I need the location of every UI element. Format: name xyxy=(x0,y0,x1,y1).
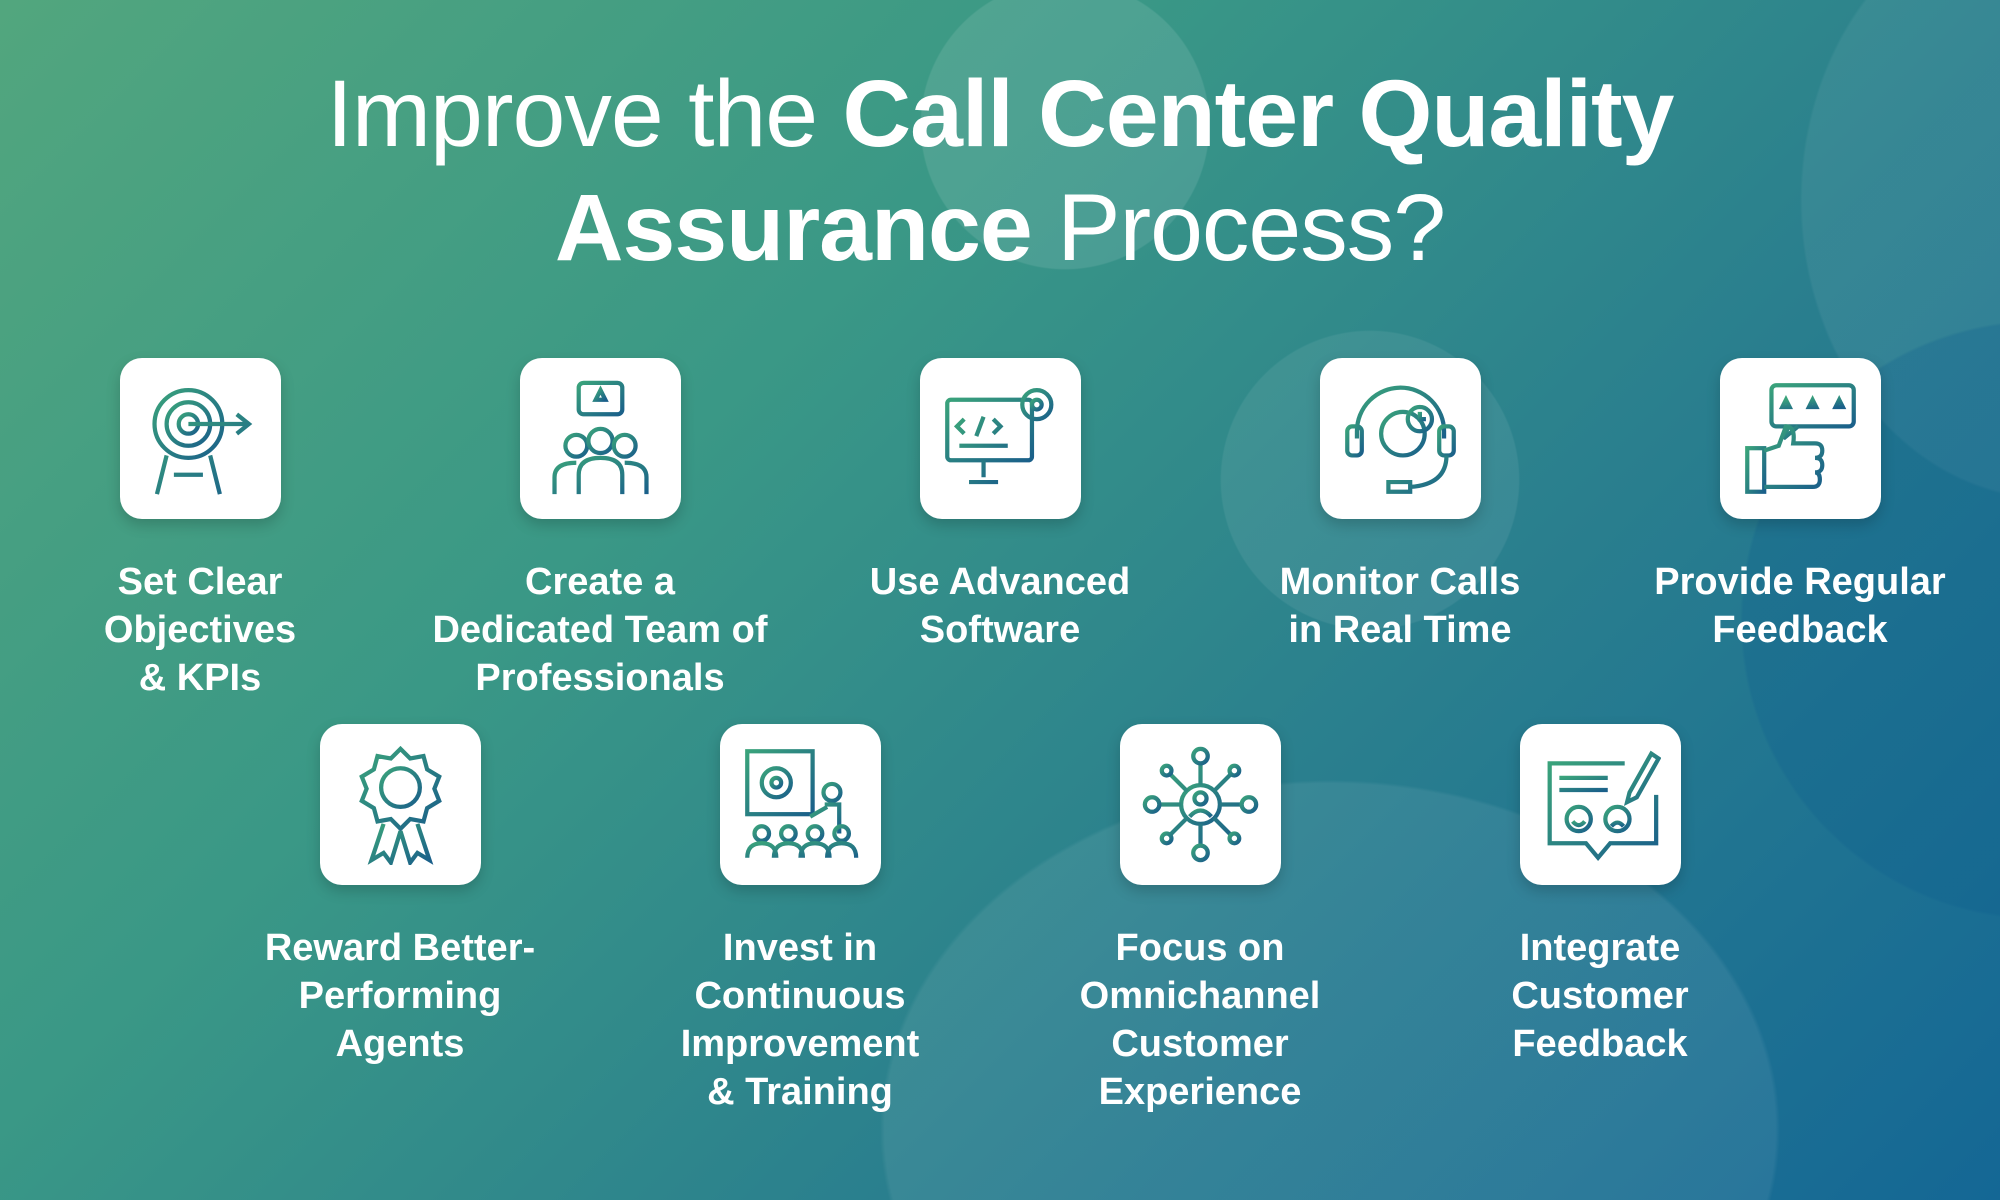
label: continuous improvement: Continuous xyxy=(694,975,906,1017)
label: monitor calls xyxy=(1280,561,1520,651)
card: software icon xyxy=(920,358,1081,519)
label: continuous improvement: & Training xyxy=(707,1071,893,1113)
label: set clear objectives: Objectives xyxy=(104,609,296,651)
label: continuous improvement: Improvement xyxy=(681,1023,919,1065)
card: training icon xyxy=(720,724,881,885)
label: regular feedback: Provide Regular xyxy=(1654,561,1946,603)
card: customer feedback icon xyxy=(1520,724,1681,885)
card: omnichannel icon xyxy=(1120,724,1281,885)
card: team icon xyxy=(520,358,681,519)
label: dedicated team: Create a xyxy=(525,561,675,603)
label: integrate feedback xyxy=(1511,927,1689,1065)
label: reward agents: Reward Better- xyxy=(265,927,535,969)
label: dedicated team: Dedicated Team of xyxy=(432,609,768,651)
card: award icon xyxy=(320,724,481,885)
title: Improve the Call Center Quality xyxy=(326,61,1673,167)
label: integrate feedback: Customer xyxy=(1511,975,1689,1017)
label: set clear objectives: & KPIs xyxy=(139,657,261,699)
label: advanced software: Use Advanced xyxy=(870,561,1130,603)
label: reward agents: Performing xyxy=(299,975,501,1017)
card: target icon xyxy=(120,358,281,519)
label: omnichannel: Focus on xyxy=(1116,927,1284,969)
card: headset icon xyxy=(1320,358,1481,519)
label: dedicated team xyxy=(432,561,768,699)
label: monitor calls: Monitor Calls xyxy=(1280,561,1520,603)
label: omnichannel: Customer xyxy=(1111,1023,1289,1065)
label: integrate feedback: Feedback xyxy=(1512,1023,1688,1065)
label: reward agents: Agents xyxy=(336,1023,464,1065)
label: continuous improvement xyxy=(681,927,919,1113)
title xyxy=(326,61,1674,281)
card: feedback thumbs up xyxy=(1720,358,1881,519)
label: set clear objectives xyxy=(104,561,296,699)
label: set clear objectives: Set Clear xyxy=(118,561,282,603)
label: integrate feedback: Integrate xyxy=(1520,927,1680,969)
label: reward agents xyxy=(265,927,535,1065)
label: continuous improvement: Invest in xyxy=(723,927,877,969)
label: advanced software: Software xyxy=(920,609,1080,651)
label: dedicated team: Professionals xyxy=(475,657,725,699)
label: monitor calls: in Real Time xyxy=(1288,609,1512,651)
label: omnichannel: Experience xyxy=(1099,1071,1301,1113)
label: omnichannel: Omnichannel xyxy=(1080,975,1320,1017)
label: regular feedback xyxy=(1654,561,1946,651)
label: regular feedback: Feedback xyxy=(1712,609,1888,651)
label: omnichannel xyxy=(1080,927,1320,1113)
title: Assurance Process? xyxy=(555,175,1445,281)
label: advanced software xyxy=(870,561,1130,651)
